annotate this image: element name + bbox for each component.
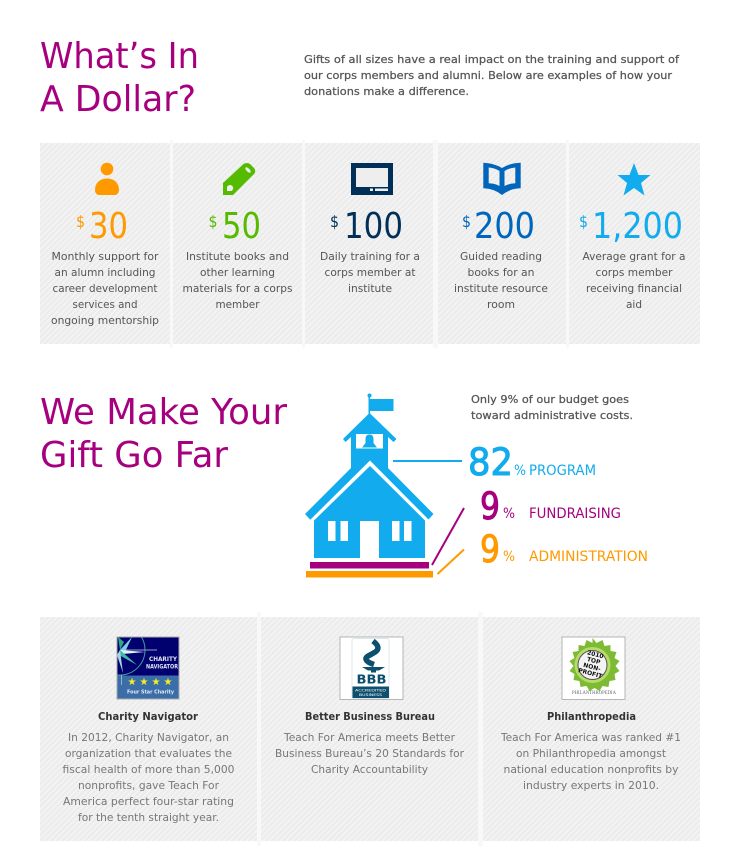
stat: 9% administration: ADMINISTRATION	[529, 549, 648, 565]
logo: BBB	[340, 637, 403, 700]
leader line: administration	[438, 550, 464, 574]
stat: 82% program: 82	[468, 441, 513, 484]
logo: Philanthropedia: 2010	[586, 649, 604, 660]
description: fiscal health of more than 5,000	[62, 763, 234, 776]
amount: $100: $	[330, 212, 339, 231]
description: Teach For America meets Better	[283, 731, 455, 744]
icon: open book	[483, 163, 521, 195]
leader line: fundraising	[432, 508, 464, 565]
heading: Better Business Bureau	[305, 710, 435, 723]
intro text: donations make a difference.	[304, 85, 469, 98]
description: corps member	[596, 266, 673, 279]
logo: BBB: BUSINESS	[359, 692, 383, 697]
amount: $100: 100	[344, 206, 403, 247]
description: ongoing mentorship	[51, 314, 159, 327]
stat: 82% program: PROGRAM	[529, 463, 596, 479]
budget note: toward administrative costs.	[471, 409, 633, 422]
heading: Philanthropedia	[547, 710, 636, 723]
bell	[362, 434, 377, 448]
logo: Charity Navigator: ★	[164, 677, 173, 688]
description	[275, 731, 464, 776]
logo: Philanthropedia	[562, 637, 625, 700]
icon: pencil	[223, 163, 255, 195]
description: nonprofits, gave Teach For	[78, 779, 219, 792]
title: What's In A Dollar: What’s In	[40, 36, 199, 77]
logo: Charity Navigator: CHARITY	[149, 655, 177, 663]
logo: Charity Navigator: NAVIGATOR	[146, 662, 178, 670]
amount: $1,200: 1,200	[592, 206, 683, 247]
logo: Charity Navigator: ★	[140, 677, 149, 688]
roof gap	[310, 460, 429, 520]
stat: 9% administration	[480, 528, 648, 571]
intro text: Gifts of all sizes have a real impact on the training and support of	[304, 53, 680, 66]
stat: 9% fundraising: FUNDRAISING	[529, 506, 621, 522]
logo: Charity Navigator: Four Star Charity	[127, 690, 174, 696]
panel: Charity Navigator	[40, 617, 257, 841]
description: corps member at	[324, 266, 416, 279]
description: institute	[348, 282, 392, 295]
stat: 82% program	[468, 441, 596, 484]
description: career development	[52, 282, 158, 295]
icon: tablet	[351, 163, 393, 195]
description: aid	[626, 298, 642, 311]
panel: $50 books	[173, 143, 302, 344]
intro text	[304, 53, 680, 98]
leader line: program	[393, 460, 462, 462]
description: Monthly support for	[52, 250, 159, 263]
intro text: our corps members and alumni. Below are examples of how your	[304, 69, 672, 82]
description: other learning	[200, 266, 275, 279]
description	[582, 250, 686, 311]
budget note	[471, 393, 633, 422]
panel: $200 guided reading	[438, 143, 566, 344]
description: room	[487, 298, 515, 311]
description: for the tenth straight year.	[78, 811, 219, 824]
stat: 9% administration: %	[503, 549, 515, 565]
logo: BBB: BBB	[356, 672, 386, 686]
title: What's In A Dollar	[40, 36, 199, 120]
amount: $200: $	[462, 212, 471, 231]
description: Average grant for a	[582, 250, 686, 263]
stat: 9% administration: 9	[480, 528, 500, 571]
description	[500, 731, 681, 792]
description: member	[216, 298, 260, 311]
description: Charity Accountability	[311, 763, 428, 776]
heading: We Make Your Gift Go Far	[40, 392, 287, 476]
stat: 9% fundraising: %	[503, 506, 515, 522]
panel: Better Business Bureau	[261, 617, 478, 841]
logo: BBB: ACCREDITED	[355, 688, 386, 692]
amount: $50: $	[208, 212, 218, 231]
description: In 2012, Charity Navigator, an	[68, 731, 229, 744]
budget note: Only 9% of our budget goes	[471, 393, 629, 406]
windows	[328, 521, 412, 541]
heading: We Make Your Gift Go Far: We Make Your	[40, 392, 287, 433]
amount: $1,200: $	[579, 212, 588, 231]
description: America perfect four-star rating	[63, 795, 234, 808]
title: What's In A Dollar: A Dollar?	[40, 79, 196, 120]
stat: 82% program: %	[514, 463, 526, 479]
description: an alumn including	[54, 266, 156, 279]
description: Daily training for a	[320, 250, 420, 263]
panel: $1,200 grant	[569, 143, 700, 344]
description: industry experts in 2010.	[523, 779, 659, 792]
flag	[368, 394, 394, 414]
description: organization that evaluates the	[65, 747, 232, 760]
amount: $50: 50	[222, 206, 261, 247]
logo: Charity Navigator: ★	[152, 677, 161, 688]
logo: Charity Navigator: ★	[128, 677, 137, 688]
icon: person	[95, 163, 119, 195]
amount: $30	[76, 206, 128, 247]
description: Business Bureau’s 20 Standards for	[275, 747, 464, 760]
base bars	[310, 562, 429, 568]
panel: Philanthropedia	[483, 617, 700, 841]
description	[320, 250, 420, 295]
logo: Charity Navigator	[116, 636, 180, 700]
description: materials for a corps	[182, 282, 293, 295]
stat: 9% fundraising	[480, 485, 621, 528]
amount: $200: 200	[474, 206, 535, 247]
amount: $30: $	[76, 212, 85, 231]
description	[51, 250, 159, 327]
description: institute resource	[454, 282, 548, 295]
tower and outer roof	[305, 413, 434, 520]
amount: $50	[208, 206, 261, 247]
logo: Philanthropedia: PHILANTHROPEDIA	[572, 691, 617, 696]
description	[62, 731, 234, 824]
panel: $30 alumn support	[40, 143, 170, 344]
heading: We Make Your Gift Go Far: Gift Go Far	[40, 435, 228, 476]
description: national education nonprofits by	[504, 763, 679, 776]
icon: schoolhouse	[305, 394, 434, 578]
description: books for an	[468, 266, 535, 279]
heading: Charity Navigator	[98, 710, 199, 723]
icon: star	[618, 163, 650, 196]
description	[182, 250, 293, 311]
stat: 9% fundraising: 9	[480, 485, 500, 528]
logo: Philanthropedia: TOP	[586, 656, 602, 666]
logo: Philanthropedia: PROFIT	[577, 667, 604, 680]
description: Teach For America was ranked #1	[500, 731, 681, 744]
description: receiving financial	[586, 282, 682, 295]
description: Guided reading	[460, 250, 542, 263]
panel: $100 daily training	[305, 143, 433, 344]
description: Institute books and	[186, 250, 289, 263]
description: on Philanthropedia amongst	[516, 747, 667, 760]
description	[454, 250, 548, 311]
amount: $30: 30	[89, 206, 128, 247]
logo: Philanthropedia: NON-	[582, 662, 602, 673]
description: services and	[72, 298, 138, 311]
body	[314, 466, 425, 558]
